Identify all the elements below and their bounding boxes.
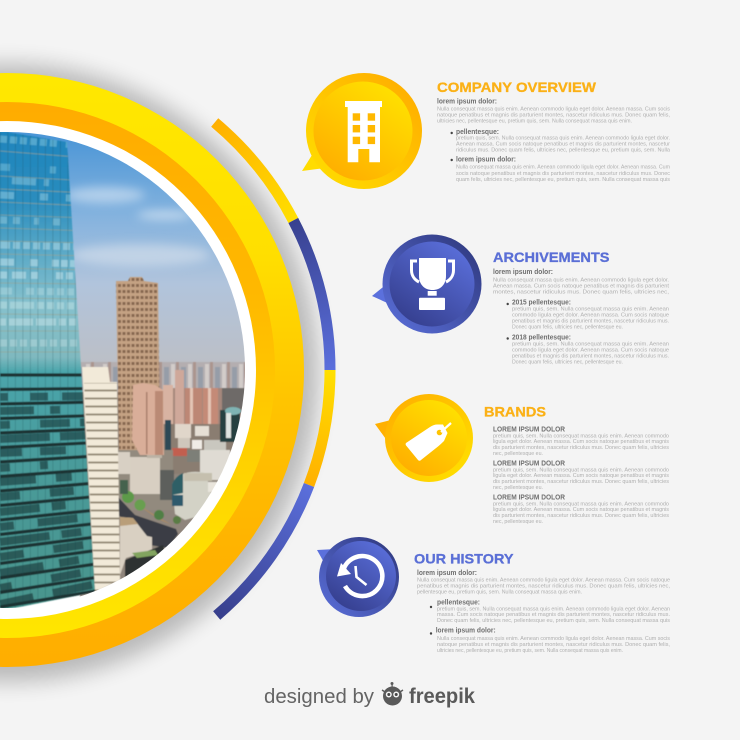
text block: item 1: pretium quis, sem. Nulla consequat massa quis enim. Aenean commodo (493, 433, 669, 439)
lower floor bands (0, 375, 96, 607)
bullet: lorem ipsum: lorem ipsum dolor: (456, 157, 516, 164)
text block: intro: lorem ipsum dolor: (437, 98, 497, 106)
text block: intro: Nulla consequat massa quis enim. Aenean commodo ligula eget dolor. Aenean massa. Cum socis natoque (417, 577, 670, 583)
distant city (79, 392, 234, 596)
glass building (0, 130, 100, 615)
text block: intro: Aenean massa. Cum socis natoque penatibus et magnis dis parturient (493, 284, 670, 290)
text block: item 3: pretium quis, sem. Nulla consequat massa quis enim. Aenean commodo (493, 501, 669, 507)
panel: our history (317, 537, 670, 654)
text block: item 2: LOREM IPSUM DOLOR (493, 460, 565, 467)
bullet: 2018: 2018 pellentesque: (512, 334, 571, 341)
text block: item 2: dis parturient montes, nascetur ridiculus mus. Donec quam felis, ultricies (493, 479, 669, 485)
bullet: pellentesque: Donec quam felis, ultricies nec, pellentesque eu, pretium quis, sem. Nulla consequat massa quis (437, 618, 670, 624)
bullet: lorem ipsum: quam felis, ultricies nec, pellentesque eu, pretium quis, sem. Nulla consequat massa quis (456, 177, 670, 183)
footer text: designed by: designed by (264, 686, 374, 708)
text block: item 3: ligula eget dolor. Aenean massa. Cum socis natoque penatibus et magnis (493, 507, 669, 513)
icon: freepik mascot (382, 682, 403, 706)
bullet: pellentesque: Aenean massa. Cum socis natoque penatibus et magnis dis parturient montes, nascetur (456, 142, 670, 148)
bullet: pellentesque (450, 129, 670, 154)
photo: city skyline (0, 130, 250, 615)
bullet: lorem ipsum: socis natoque penatibus et magnis dis parturient montes, nascetur ridiculus mus. Donec (456, 171, 670, 177)
text block: item 2: pretium quis, sem. Nulla consequat massa quis enim. Aenean commodo (493, 467, 669, 473)
text block: intro: lorem ipsum dolor: (493, 269, 553, 276)
text block: item 3: dis parturient montes, nascetur ridiculus mus. Donec quam felis, ultricies (493, 513, 669, 519)
mid-rise and ground (163, 449, 174, 470)
bullet: 2018: pretium quis, sem. Nulla consequat massa quis enim. Aenean (512, 342, 669, 348)
upper light panes (0, 135, 78, 347)
road (118, 497, 178, 548)
bullet: 2018: commodo ligula eget dolor. Aenean massa. Cum socis natoque (512, 348, 669, 354)
cream building (82, 367, 120, 592)
bullet: 2015 (506, 300, 669, 330)
arc segment: yellow lower (309, 370, 330, 485)
panel: brands (375, 394, 669, 525)
text block: item 1 (493, 426, 669, 457)
tower under construction (116, 277, 160, 450)
bullet: lorem ipsum: Nulla consequat massa quis enim. Aenean commodo ligula eget dolor. Aenean massa. Cum (456, 165, 670, 171)
text block: item 3 (493, 494, 669, 525)
arc segment: blue upper (293, 220, 330, 370)
heading: brands: BRANDS (484, 404, 546, 420)
heading: our history: OUR HISTORY (414, 550, 514, 566)
outer ring (0, 73, 304, 667)
panel: company overview (302, 73, 670, 189)
icon: tag badge (375, 394, 473, 482)
text block: intro: Nulla consequat massa quis enim. Aenean commodo ligula eget dolor. (493, 278, 669, 284)
text block: item 2: nec, pellentesque eu. (493, 485, 543, 491)
lower dark panes (0, 396, 96, 604)
inner ring (0, 102, 275, 638)
lower white block (120, 517, 152, 575)
bullet: 2018: Donec quam felis, ultricies nec, pellentesque eu. (512, 360, 623, 366)
text block: intro: Nulla consequat massa quis enim. Aenean commodo ligula eget dolor. Aenean massa. Cum socis (437, 106, 670, 112)
footer: freepik credit (264, 682, 475, 708)
bullet: pellentesque: pellentesque: (437, 600, 480, 607)
text block: item 1: dis parturient montes, nascetur ridiculus mus. Donec quam felis, ultricies (493, 445, 669, 451)
text block: intro: natoque penatibus et magnis dis parturient montes, nascetur ridiculus mus. Donec quam felis, (437, 112, 670, 118)
text block: intro: ultricies nec, pellentesque eu, pretium quis, sem. Nulla consequat massa quis enim. (437, 118, 632, 124)
heading: archivements: ARCHIVEMENTS (493, 249, 610, 265)
bullet: 2015: pretium quis, sem. Nulla consequat massa quis enim. Aenean (512, 306, 669, 312)
text block: intro: pellentesque eu, pretium quis, sem. Nulla consequat massa quis enim. (417, 589, 582, 595)
text block: item 3: nec, pellentesque eu. (493, 519, 543, 525)
text block: intro (437, 98, 670, 124)
heading: company overview: COMPANY OVERVIEW (437, 79, 597, 95)
text block: item 1: nec, pellentesque eu. (493, 451, 543, 457)
icon: building badge (302, 73, 422, 189)
curved building (172, 472, 213, 520)
bullet: 2015: penatibus et magnis dis parturient montes, nascetur ridiculus mus. (512, 318, 669, 324)
bullet: lorem ipsum (450, 157, 670, 183)
text block: intro: lorem ipsum dolor: (417, 570, 477, 577)
bullet: pellentesque: pellentesque: (456, 129, 499, 136)
bullet: pellentesque: ridiculus mus. Donec quam felis, ultricies nec, pellentesque eu, pretium quis, sem. Nulla (456, 148, 670, 154)
bullet: pellentesque (430, 600, 670, 624)
arc segment: yellow top (215, 122, 293, 220)
text block: intro (493, 269, 670, 296)
bullet: pellentesque: massa. Cum socis natoque penatibus et magnis dis parturient montes, nascetur ridiculus mus. (437, 612, 670, 618)
pink building (132, 383, 164, 455)
big circle with photo (0, 64, 318, 682)
footer text: freepik: freepik (409, 685, 475, 708)
text block: item 1: ligula eget dolor. Aenean massa. Cum socis natoque penatibus et magnis (493, 439, 669, 445)
bullet: lorem ipsum: Nulla consequat massa quis enim. Aenean commodo ligula eget dolor. Aenean massa. Cum socis (437, 636, 670, 642)
segmented outer arc (215, 122, 330, 616)
text block: intro (417, 570, 670, 595)
trees (122, 491, 134, 503)
text block: item 3: LOREM IPSUM DOLOR (493, 494, 565, 501)
arc segment: blue bottom (217, 485, 309, 616)
text block: item 2: ligula eget dolor. Aenean massa. Cum socis natoque penatibus et magnis (493, 473, 669, 479)
icon: clock badge (317, 537, 399, 617)
upper floor lines (0, 150, 80, 353)
bullet: lorem ipsum: natoque penatibus et magnis dis parturient montes, nascetur ridiculus mus. Donec quam felis, (437, 642, 670, 648)
text block: intro: penatibus et magnis dis parturient montes, nascetur ridiculus mus. Donec quam felis, ultricies nec, (417, 583, 670, 589)
bullet: 2015: Donec quam felis, ultricies nec, pellentesque eu. (512, 324, 623, 330)
bullet: lorem ipsum: lorem ipsum dolor: (436, 627, 496, 634)
panel: achievements (372, 234, 670, 366)
white ring (0, 121, 256, 619)
bullet: pellentesque: pretium quis, sem. Nulla consequat massa quis enim. Aenean commodo ligula eget dolor. Aenean (437, 606, 670, 612)
bullet: 2018 (506, 334, 669, 366)
bullet: 2015: 2015 pellentesque: (512, 300, 571, 307)
text block: item 2 (493, 460, 669, 491)
bullet: 2018: penatibus et magnis dis parturient montes, nascetur ridiculus mus. (512, 354, 669, 360)
bullet: pellentesque: pretium quis, sem. Nulla consequat massa quis enim. Aenean commodo ligula eget dolor. (456, 136, 670, 142)
bullet: lorem ipsum (430, 627, 670, 654)
icon: trophy badge (372, 234, 482, 334)
text block: intro: montes, nascetur ridiculus mus. Donec quam felis, ultricies nec, (493, 290, 669, 296)
circle shadow (0, 64, 318, 682)
middle rooftops (163, 424, 233, 474)
bullet: lorem ipsum: ultricies nec, pellentesque eu, pretium quis, sem. Nulla consequat massa quis enim. (437, 648, 623, 654)
bullet: 2015: commodo ligula eget dolor. Aenean massa. Cum socis natoque (512, 312, 669, 318)
text block: item 1: LOREM IPSUM DOLOR (493, 426, 565, 433)
